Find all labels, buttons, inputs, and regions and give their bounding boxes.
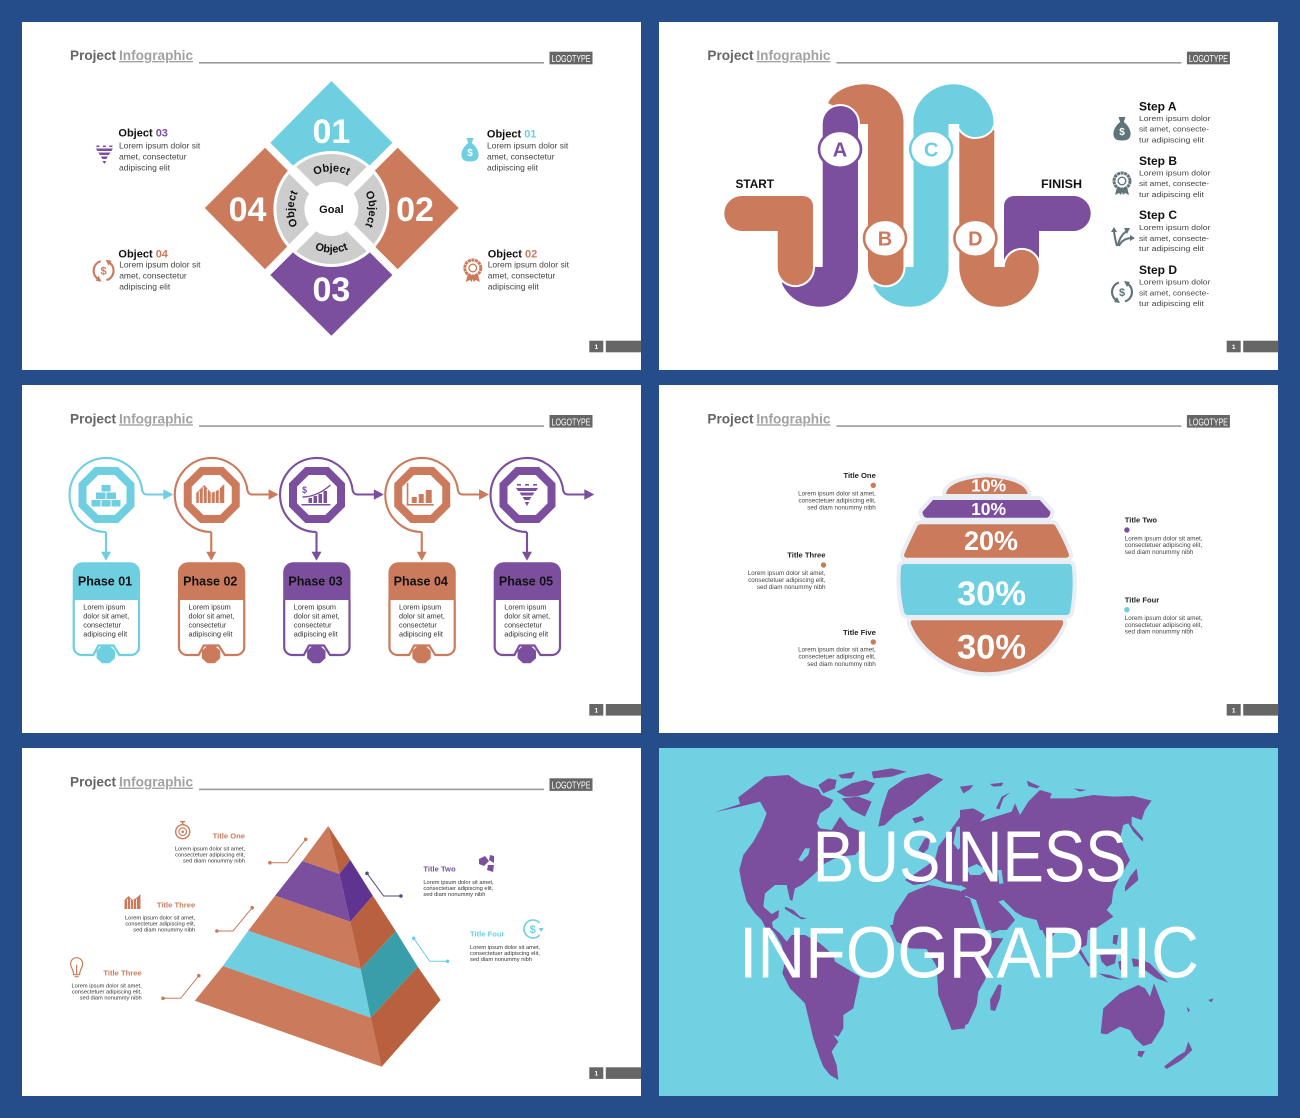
phase card: Phase 05 [499,574,553,588]
phase card: consectetur [189,621,227,630]
label: title three: Title Three [787,551,826,560]
header: project infographic: Infographic [119,48,193,63]
header: project infographic: Project [70,411,117,426]
chart values: 30% [957,575,1026,613]
label: title one: Title One [843,471,876,480]
label: title three lower: Lorem ipsum dolor sit amet, [72,983,142,989]
header: project infographic: LOGOTYPE [1189,416,1228,428]
header: project infographic: LOGOTYPE [552,53,590,65]
panel: steps snake [659,22,1278,370]
label: title four [470,930,541,963]
phase card: dolor sit amet, [504,612,550,620]
step badges: A [833,140,847,162]
phase card: Phase 03 [288,574,343,588]
curved labels: Object [286,190,298,227]
icon: award [465,260,481,282]
phase card: Lorem ipsum [294,602,336,611]
chart values: 10% [971,499,1007,519]
label: finish: FINISH [1041,177,1082,191]
icon: dollar growth: $ [302,485,307,495]
text: step c: sit amet, consecte- [1139,234,1210,243]
chart values: 10% [971,476,1007,496]
text: step a [1139,100,1211,145]
world map [714,768,1213,1080]
label: title one [798,471,876,512]
text: object 03: Lorem ipsum dolor sit [119,141,201,151]
label: title three lower [72,969,142,1001]
text: object 01: amet, consectetur [487,152,555,162]
step badges: C [924,140,938,162]
icon: dollar cycle [94,260,114,282]
phase card: Phase 04 [394,574,448,588]
icon: money bag [1113,117,1131,140]
label: title two [423,865,494,898]
diamond numbers: 03 [312,271,350,309]
text: step b: sit amet, consecte- [1139,179,1210,188]
phase 03 [280,458,384,663]
label: title two: sed diam nonummy nibh [1125,549,1194,556]
curved labels [286,163,378,255]
label: title five: Lorem ipsum dolor sit amet, [798,647,876,654]
label: title two: Lorem ipsum dolor sit amet, [423,880,494,886]
phase card: adipiscing elit [294,630,338,639]
phase 02 [175,458,279,663]
title: business infographic: BUSINESS [813,818,1127,898]
text: step a: tur adipiscing elit [1139,136,1204,145]
panel: pyramid [22,748,641,1096]
step badges [819,131,996,257]
phase card: adipiscing elit [83,630,127,639]
page number [589,1067,641,1079]
panel: goal diamond [22,22,641,370]
phase card: dolor sit amet, [399,612,445,620]
phase card: Lorem ipsum [399,602,441,611]
text: step d: Lorem ipsum dolor [1139,278,1211,286]
label: title three: consectetuer adipiscing elit, [748,577,826,584]
text: object 04: Object 04 [118,248,169,260]
icon: bar chart [407,483,434,506]
header: project infographic [70,775,592,792]
curved labels: Object [316,243,348,255]
title: business infographic: INFOGRAPHIC [739,914,1199,994]
header: project infographic [707,411,1230,428]
icon: dollar cycle [524,920,544,938]
phase card [178,562,245,663]
text: step a: Lorem ipsum dolor [1139,114,1211,123]
label: title four: consectetuer adipiscing elit, [1125,622,1202,629]
label: title three: Title Three [157,901,195,910]
text: object 01 [487,128,569,172]
label: title three lower: Title Three [103,969,142,978]
phase card: Phase 02 [183,574,237,588]
icon: money bag: $ [1119,127,1125,138]
phase card: adipiscing elit [504,630,548,639]
label: title one: sed diam nonummy nibh [807,505,876,512]
diamond numbers: 04 [229,191,266,229]
label: title two: Lorem ipsum dolor sit amet, [1125,535,1203,542]
icon: light bulb [71,958,83,977]
header: project infographic [70,48,592,65]
title: business infographic [739,818,1199,994]
text: object 01: Lorem ipsum dolor sit [487,141,569,151]
phase 04 [385,458,489,663]
label: title one: sed diam nonummy nibh [183,859,245,865]
label: title four: sed diam nonummy nibh [1125,629,1194,636]
text: step a: sit amet, consecte- [1139,125,1210,134]
icon: funnel [516,484,538,506]
phase card: Lorem ipsum [504,602,546,611]
label: title four: consectetuer adipiscing elit, [470,951,540,957]
text: step b: Step B [1139,154,1177,168]
text: object 03: adipiscing elit [119,162,171,172]
leader lines [161,838,449,1000]
icon: money bag [461,138,479,162]
phase 05 [491,458,594,663]
label: title five: sed diam nonummy nibh [807,661,876,668]
header: project infographic: LOGOTYPE [552,780,590,792]
diamond diagram [204,81,459,336]
page number [589,704,641,716]
header: project infographic: Project [70,48,117,63]
page number: 1 [1232,707,1236,714]
text: object 03: amet, consectetur [119,152,187,162]
icon: dollar cycle: $ [1119,287,1125,299]
label: title three lower: consectetuer adipiscing elit, [72,989,142,995]
label: title three: consectetuer adipiscing elit, [125,922,196,928]
label: title one: Lorem ipsum dolor sit amet, [175,847,245,853]
phase card: Lorem ipsum [189,602,231,611]
phase card: dolor sit amet, [189,612,234,620]
phase card [283,562,350,663]
icon: dollar cycle: $ [530,924,536,936]
text: object 04: amet, consectetur [119,270,187,280]
label: title four: sed diam nonummy nibh [470,957,532,963]
phase card: consectetur [504,621,543,630]
phase card: consectetur [399,621,437,630]
label: title two: consectetuer adipiscing elit, [423,886,494,892]
phase card [494,562,561,663]
text: object 02: Lorem ipsum dolor sit [488,260,570,270]
header: project infographic: LOGOTYPE [552,416,590,428]
label: title one: consectetuer adipiscing elit, [798,498,876,504]
phase card: consectetur [294,621,332,630]
chart values: 20% [964,526,1018,556]
page number: 1 [1232,344,1236,351]
page number: 1 [594,344,598,351]
header: project infographic: Infographic [119,411,193,426]
phase card: Phase 01 [78,574,132,588]
phase card: dolor sit amet, [294,612,340,620]
chart values: 30% [957,628,1026,666]
text: step c: Step C [1139,208,1177,222]
curved labels: Object [365,191,378,228]
icon: award [1114,173,1130,195]
header: project infographic: Project [707,411,754,426]
icon: dollar cycle [1112,281,1132,303]
page number: 1 [594,707,598,714]
page number: 1 [594,1071,598,1078]
label: title two: Title Two [1125,516,1157,525]
text: step c: tur adipiscing elit [1139,244,1204,253]
icon: dollar cycle: $ [101,266,107,278]
label: title three: Lorem ipsum dolor sit amet, [125,915,196,921]
label: title two: Title Two [423,865,456,874]
text: step d: tur adipiscing elit [1139,299,1204,308]
label: title four [1124,596,1203,636]
header: project infographic: Infographic [756,48,831,63]
text: step b: tur adipiscing elit [1139,190,1204,199]
text: object 04: Lorem ipsum dolor sit [119,260,201,270]
phase card: Lorem ipsum [83,602,125,611]
snake diagram [724,84,1091,307]
header: project infographic: LOGOTYPE [1189,53,1228,65]
step badges: D [968,228,983,250]
phase card: consectetur [83,621,122,630]
label: title three: Lorem ipsum dolor sit amet, [748,570,826,577]
label: title four: Title Four [1125,596,1159,605]
text: step c: Lorem ipsum dolor [1139,223,1211,232]
label: title five: consectetuer adipiscing elit, [798,654,876,661]
header: project infographic [70,411,592,428]
step badges: B [878,228,892,250]
icon: area chart [196,484,224,503]
label: title three: sed diam nonummy nibh [757,584,826,591]
icon: area chart [124,894,140,909]
label: title five: Title Five [843,628,876,637]
text: step c [1139,208,1211,253]
chart values [957,476,1026,666]
label: title two: sed diam nonummy nibh [423,892,485,898]
center label: Goal [319,204,344,216]
diamond numbers: 01 [312,113,350,151]
icon: money bag: $ [467,148,473,159]
text: step b: Lorem ipsum dolor [1139,168,1211,178]
label: title two: consectetuer adipiscing elit, [1125,542,1202,549]
text: step d: Step D [1139,263,1177,277]
phase card [73,562,140,663]
diamond numbers [229,113,434,309]
text: step d: sit amet, consecte- [1139,288,1210,298]
header: project infographic: Infographic [756,411,831,426]
text: object 02 [488,248,570,292]
header: project infographic: Project [707,48,754,63]
text: object 04: adipiscing elit [119,282,171,292]
header: project infographic [707,48,1230,65]
text: step d [1139,263,1211,308]
text: object 01: adipiscing elit [487,162,539,172]
page number [1227,341,1278,352]
label: title one: Title One [213,832,245,841]
pyramid chart [195,826,441,1067]
label: title three: sed diam nonummy nibh [133,928,195,934]
page number [1227,704,1278,716]
text: object 03: Object 03 [118,128,168,140]
header: project infographic: Project [70,775,117,790]
icon: dollar growth [302,485,330,506]
text: step b [1139,154,1211,199]
icon: cluster [479,855,494,872]
label: title four: Title Four [470,930,504,939]
icon: stopwatch target [176,822,190,839]
text: object 01: Object 01 [487,128,536,140]
icon: stacked blocks [92,485,120,506]
icon: funnel [96,146,113,164]
label: start: START [736,177,775,191]
diamond numbers: 02 [396,191,434,229]
icon: branching arrows [1111,227,1135,246]
label: title four: Lorem ipsum dolor sit amet, [1125,615,1203,622]
curved labels: Object [314,163,350,176]
phase card: adipiscing elit [399,630,443,639]
label: title three [125,901,196,934]
text: object 03 [118,128,201,172]
text: object 04 [118,248,201,292]
label: title one: consectetuer adipiscing elit, [175,853,245,859]
text: object 02: amet, consectetur [488,270,555,280]
header: project infographic: Infographic [119,775,193,790]
label: title three lower: sed diam nonummy nibh [80,995,142,1001]
phase card: adipiscing elit [189,630,232,639]
panel: percentage egg [659,385,1278,733]
text: step a: Step A [1139,100,1177,114]
phase 01 [70,458,173,663]
text: object 02: adipiscing elit [488,282,539,292]
label: title five [798,628,876,668]
phase card [388,562,456,663]
text: object 02: Object 02 [488,248,537,260]
label: title four: Lorem ipsum dolor sit amet, [470,945,541,951]
label: title three [748,551,826,591]
page number [589,341,641,352]
phase card: dolor sit amet, [83,612,129,620]
label: title one [175,832,245,865]
panel: world map cover [659,748,1278,1096]
panel: phases [22,385,641,733]
label: title two [1124,516,1203,556]
label: title one: Lorem ipsum dolor sit amet, [798,491,876,498]
egg chart [900,477,1073,672]
